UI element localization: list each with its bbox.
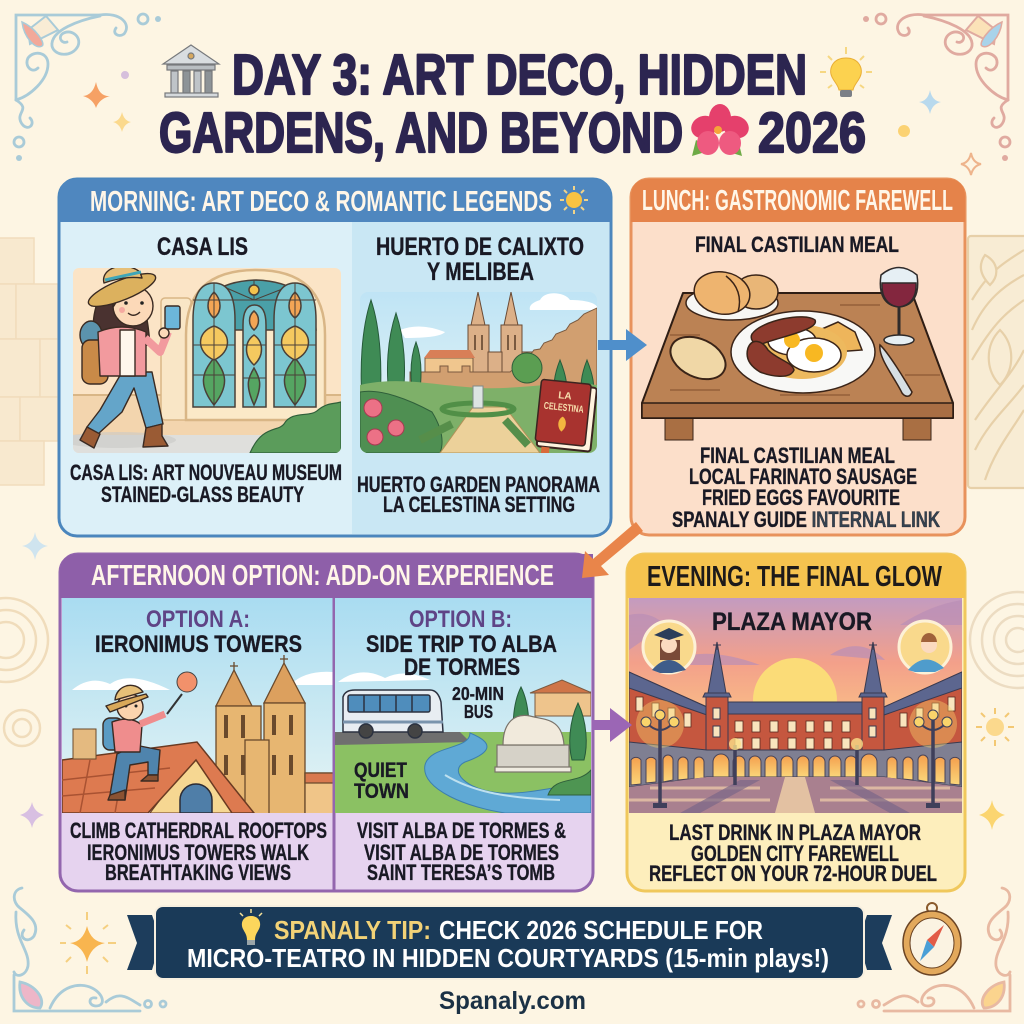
icon: gold sparkle: [60, 912, 116, 974]
bus duration label: 20-MIN: [452, 684, 504, 704]
lunch caption: FINAL CASTILIAN MEAL: [700, 443, 895, 468]
terracotta roof: [62, 742, 254, 813]
plaza mayor title: PLAZA MAYOR: [712, 608, 872, 636]
option b caption: SAINT TERESA’S TOMB: [367, 860, 555, 885]
option b caption: VISIT ALBA DE TORMES &: [357, 818, 566, 843]
illustration: huerto garden: [360, 292, 598, 462]
illustration: table with meal: [642, 267, 953, 440]
heading line 1: DAY 3: ART DECO, HIDDEN: [232, 43, 807, 107]
option b caption: VISIT ALBA DE TORMES: [364, 840, 559, 865]
lunch caption: [672, 443, 940, 532]
distant building: [535, 692, 591, 716]
city wall: [410, 308, 597, 388]
option a caption: CLIMB CATHERDRAL ROOFTOPS: [70, 818, 327, 843]
huerto caption: HUERTO GARDEN PANORAMA: [357, 472, 600, 497]
tomb: [495, 715, 571, 772]
bus: [343, 690, 443, 738]
chimney: [73, 729, 96, 759]
huerto caption: LA CELESTINA SETTING: [383, 492, 575, 517]
decorative sparkles: [20, 71, 1014, 830]
website footer: Spanaly.com: [439, 987, 586, 1015]
option b title: OPTION B:: [409, 606, 512, 633]
lunch caption: LOCAL FARINATO SAUSAGE: [689, 464, 917, 489]
stained glass window: [186, 270, 325, 420]
quiet town label: TOWN: [354, 780, 409, 803]
casa lis caption: [70, 460, 342, 507]
fried egg plate: [731, 311, 875, 393]
quiet town label: [354, 762, 408, 798]
tip text: [187, 915, 829, 973]
evening caption: LAST DRINK IN PLAZA MAYOR: [669, 820, 921, 845]
huerto caption: [357, 472, 600, 517]
book: CELESTINA: [543, 401, 584, 416]
illustration: casa lis window and traveller: [60, 266, 341, 453]
arrow: lunch to afternoon: [582, 522, 643, 578]
tip banner: [127, 906, 892, 979]
casa lis title: CASA LIS: [157, 233, 248, 261]
tip text: MICRO-TEATRO IN HIDDEN COURTYARDS (15-min plays!): [187, 943, 829, 973]
bread plate: [686, 267, 778, 320]
icon: hibiscus flower: [688, 104, 752, 156]
icon: museum: [163, 45, 219, 97]
heading year: 2026: [758, 101, 866, 165]
casa lis caption: CASA LIS: ART NOUVEAU MUSEUM: [70, 460, 342, 485]
tip text: CHECK 2026 SCHEDULE FOR: [439, 915, 763, 945]
river: [425, 733, 591, 813]
left stone wall backdrop: [0, 238, 58, 485]
quiet town label: QUIET: [354, 759, 407, 782]
panel: afternoon: [60, 554, 593, 891]
right art nouveau backdrop: [968, 236, 1024, 488]
house gable: [150, 761, 231, 813]
central building: [728, 714, 862, 750]
cypress trees: [360, 298, 594, 385]
corner ornament: bottom right: [858, 888, 1010, 1011]
ribbon tails: [127, 915, 892, 970]
arrow: morning to lunch: [598, 329, 647, 361]
right swirl backdrop: [970, 592, 1024, 688]
tip text: SPANALY TIP:: [274, 915, 431, 945]
option a caption: IERONIMUS TOWERS WALK: [87, 840, 309, 865]
panel: evening: [627, 554, 965, 891]
morning heading: MORNING: ART DECO & ROMANTIC LEGENDS: [90, 186, 552, 218]
lunch subtitle: FINAL CASTILIAN MEAL: [695, 232, 899, 257]
option b title: DE TORMES: [404, 654, 520, 681]
bush: [548, 770, 591, 795]
heading line 2: GARDENS, AND BEYOND: [159, 101, 683, 165]
corner ornament: top right: [863, 14, 1010, 161]
lunch header bar: [631, 179, 965, 222]
side wings: [629, 672, 962, 750]
huerto title: [376, 233, 584, 286]
selfie stick with balloon: [167, 672, 197, 714]
option a title: IERONIMUS TOWERS: [95, 631, 302, 658]
option a caption: [70, 818, 327, 885]
option a title: [95, 606, 302, 658]
cathedral towers: [216, 655, 335, 818]
icon: light bulb: [820, 47, 872, 97]
icon: sun: [560, 186, 588, 214]
book: LA: [558, 390, 572, 402]
option b title: [366, 606, 557, 681]
panel: morning: [59, 179, 611, 536]
towers: [703, 642, 887, 752]
knife: [880, 345, 912, 396]
icon: compass: [903, 903, 961, 975]
bus duration label: [452, 686, 504, 718]
option divider: [332, 598, 336, 891]
huerto title: Y MELIBEA: [427, 258, 534, 286]
cathedral: [468, 292, 532, 372]
paved square: [629, 777, 962, 813]
evening header bar: [627, 554, 965, 598]
clouds: [400, 293, 598, 338]
panel: lunch: [631, 179, 965, 535]
toast: [664, 329, 732, 387]
title: [159, 43, 872, 165]
illustration: alba de tormes: [335, 598, 592, 813]
morning header bar: [59, 179, 611, 222]
bush: [250, 402, 341, 453]
casa lis caption: STAINED-GLASS BEAUTY: [101, 482, 304, 507]
lunch caption: FRIED EGGS FAVOURITE: [702, 485, 900, 510]
cypress trees: [513, 687, 586, 760]
option b title: SIDE TRIP TO ALBA: [366, 631, 557, 658]
climbing traveller: [103, 685, 165, 800]
afternoon heading: AFTERNOON OPTION: ADD-ON EXPERIENCE: [91, 560, 554, 592]
traveller: [73, 268, 181, 449]
option a caption: BREATHTAKING VIEWS: [105, 860, 291, 885]
arcade: [629, 742, 962, 787]
afternoon header bar: [60, 554, 593, 598]
corner ornament: top left: [14, 14, 161, 161]
option a title: OPTION A:: [146, 606, 250, 633]
roses: [364, 399, 404, 445]
panel section: right column tint: [352, 222, 609, 534]
corner ornament: bottom left: [14, 888, 166, 1011]
wine glass: [880, 268, 918, 345]
evening caption: REFLECT ON YOUR 72-HOUR DUEL: [649, 861, 937, 886]
left swirl backdrop: [0, 598, 48, 746]
bus duration label: BUS: [464, 702, 493, 722]
student medallion: [899, 621, 951, 673]
graduate medallion: [643, 621, 695, 673]
book: [534, 378, 597, 453]
lamp posts: [636, 700, 957, 808]
arrow: afternoon to evening: [592, 708, 632, 742]
huerto title: HUERTO DE CALIXTO: [376, 233, 584, 261]
road: [335, 732, 470, 745]
lunch caption: SPANALY GUIDE INTERNAL LINK: [672, 507, 940, 532]
illustration: ieronimus towers: [62, 598, 335, 818]
option b caption: [357, 818, 566, 885]
illustration: plaza mayor: [629, 598, 962, 813]
evening caption: GOLDEN CITY FAREWELL: [691, 841, 899, 866]
lawn and hedges: [360, 381, 597, 453]
icon: tip bulb: [240, 909, 262, 945]
evening caption: [649, 820, 937, 886]
